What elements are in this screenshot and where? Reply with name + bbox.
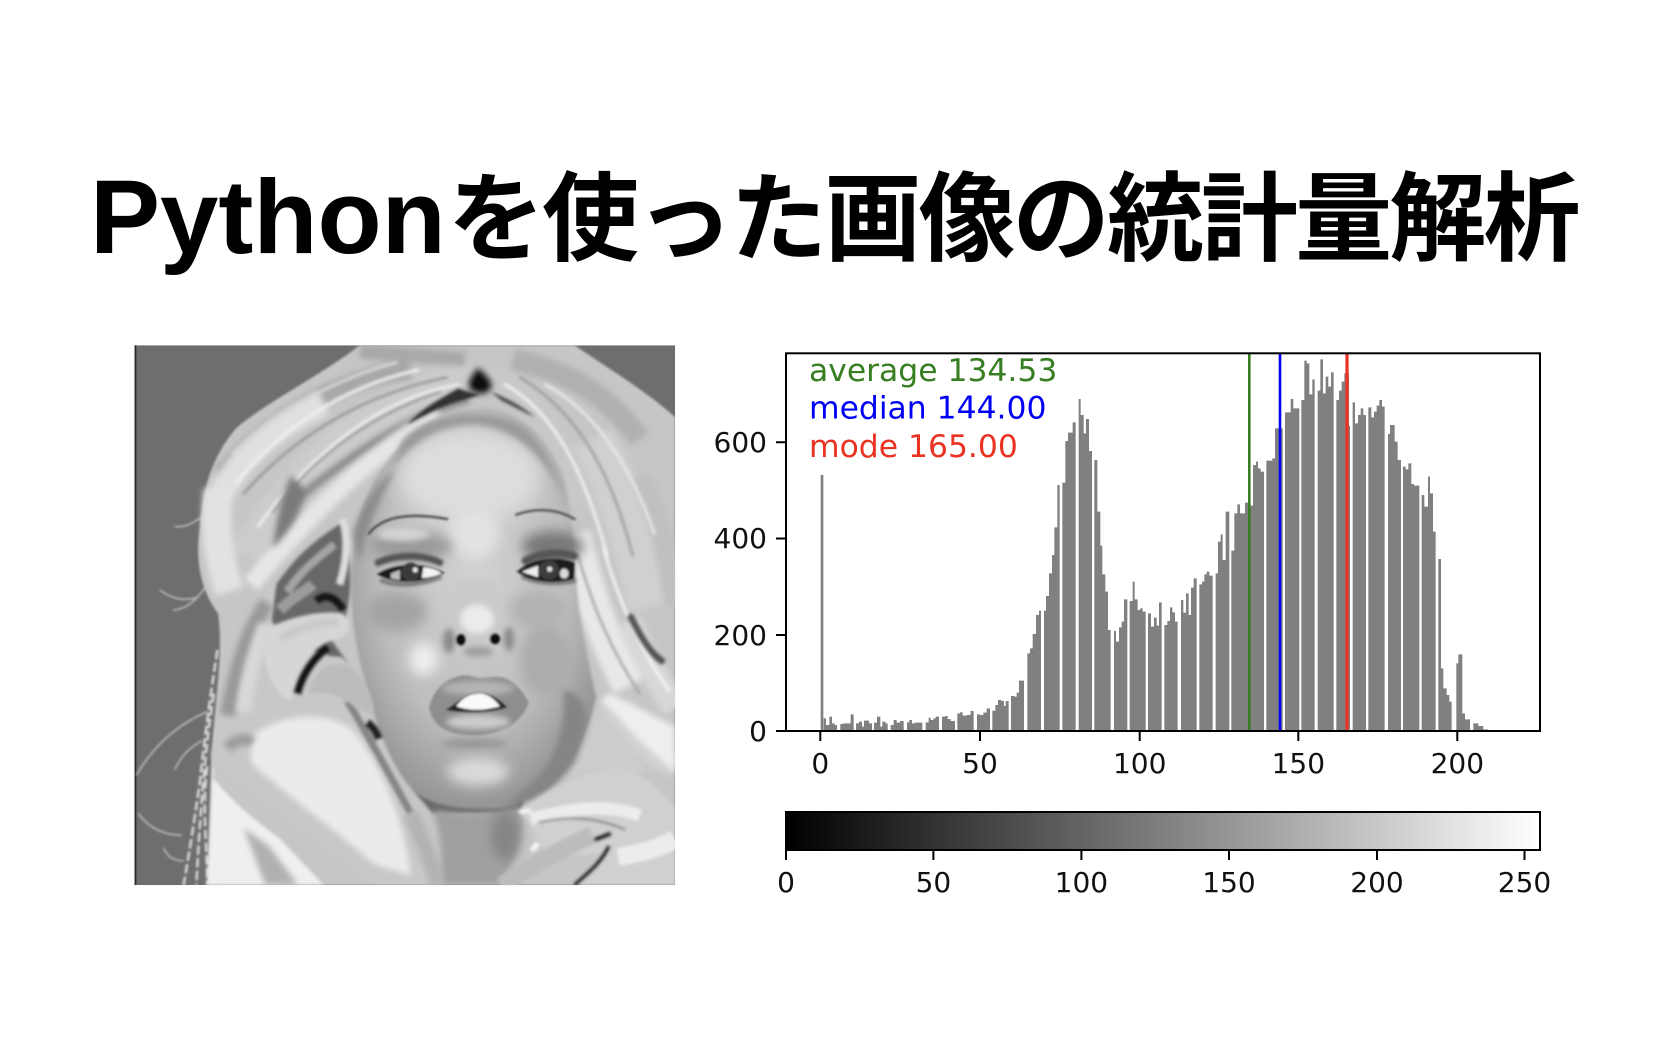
y axis ticks [776,442,786,731]
histogram panel [714,353,1540,780]
y axis labels [714,426,767,748]
x axis labels: 200 [1431,747,1484,780]
gradient strip [786,812,1540,850]
x axis labels: 0 [811,747,829,780]
colour bar labels: 200 [1350,866,1404,899]
colour bar labels [777,866,1551,899]
statistics legend [809,353,1057,465]
title: Pythonを使った画像の統計量解析 [90,159,1578,276]
statistics legend: mode 165.00 [809,429,1018,465]
histogram bars [821,359,1500,731]
x axis labels [811,747,1484,780]
y axis labels: 0 [749,715,767,748]
x axis labels: 100 [1113,747,1166,780]
average line [1248,353,1251,731]
colour bar labels: 150 [1202,866,1256,899]
grayscale portrait photo [135,345,675,885]
colour bar ticks [786,850,1524,860]
grayscale colour bar [777,812,1551,899]
colour bar labels: 50 [916,866,951,899]
y axis labels: 200 [714,619,767,652]
y axis labels: 400 [714,522,767,555]
colour bar labels: 250 [1498,866,1551,899]
plot axes frame [786,353,1540,731]
x axis labels: 150 [1272,747,1325,780]
median line [1279,353,1281,731]
mode line [1345,353,1349,731]
statistics legend: average 134.53 [809,353,1057,389]
y axis labels: 600 [714,426,767,459]
x axis labels: 50 [962,747,998,780]
colour bar labels: 0 [777,866,795,899]
statistics legend: median 144.00 [809,390,1046,426]
colour bar labels: 100 [1055,866,1108,899]
x axis ticks [820,731,1457,741]
